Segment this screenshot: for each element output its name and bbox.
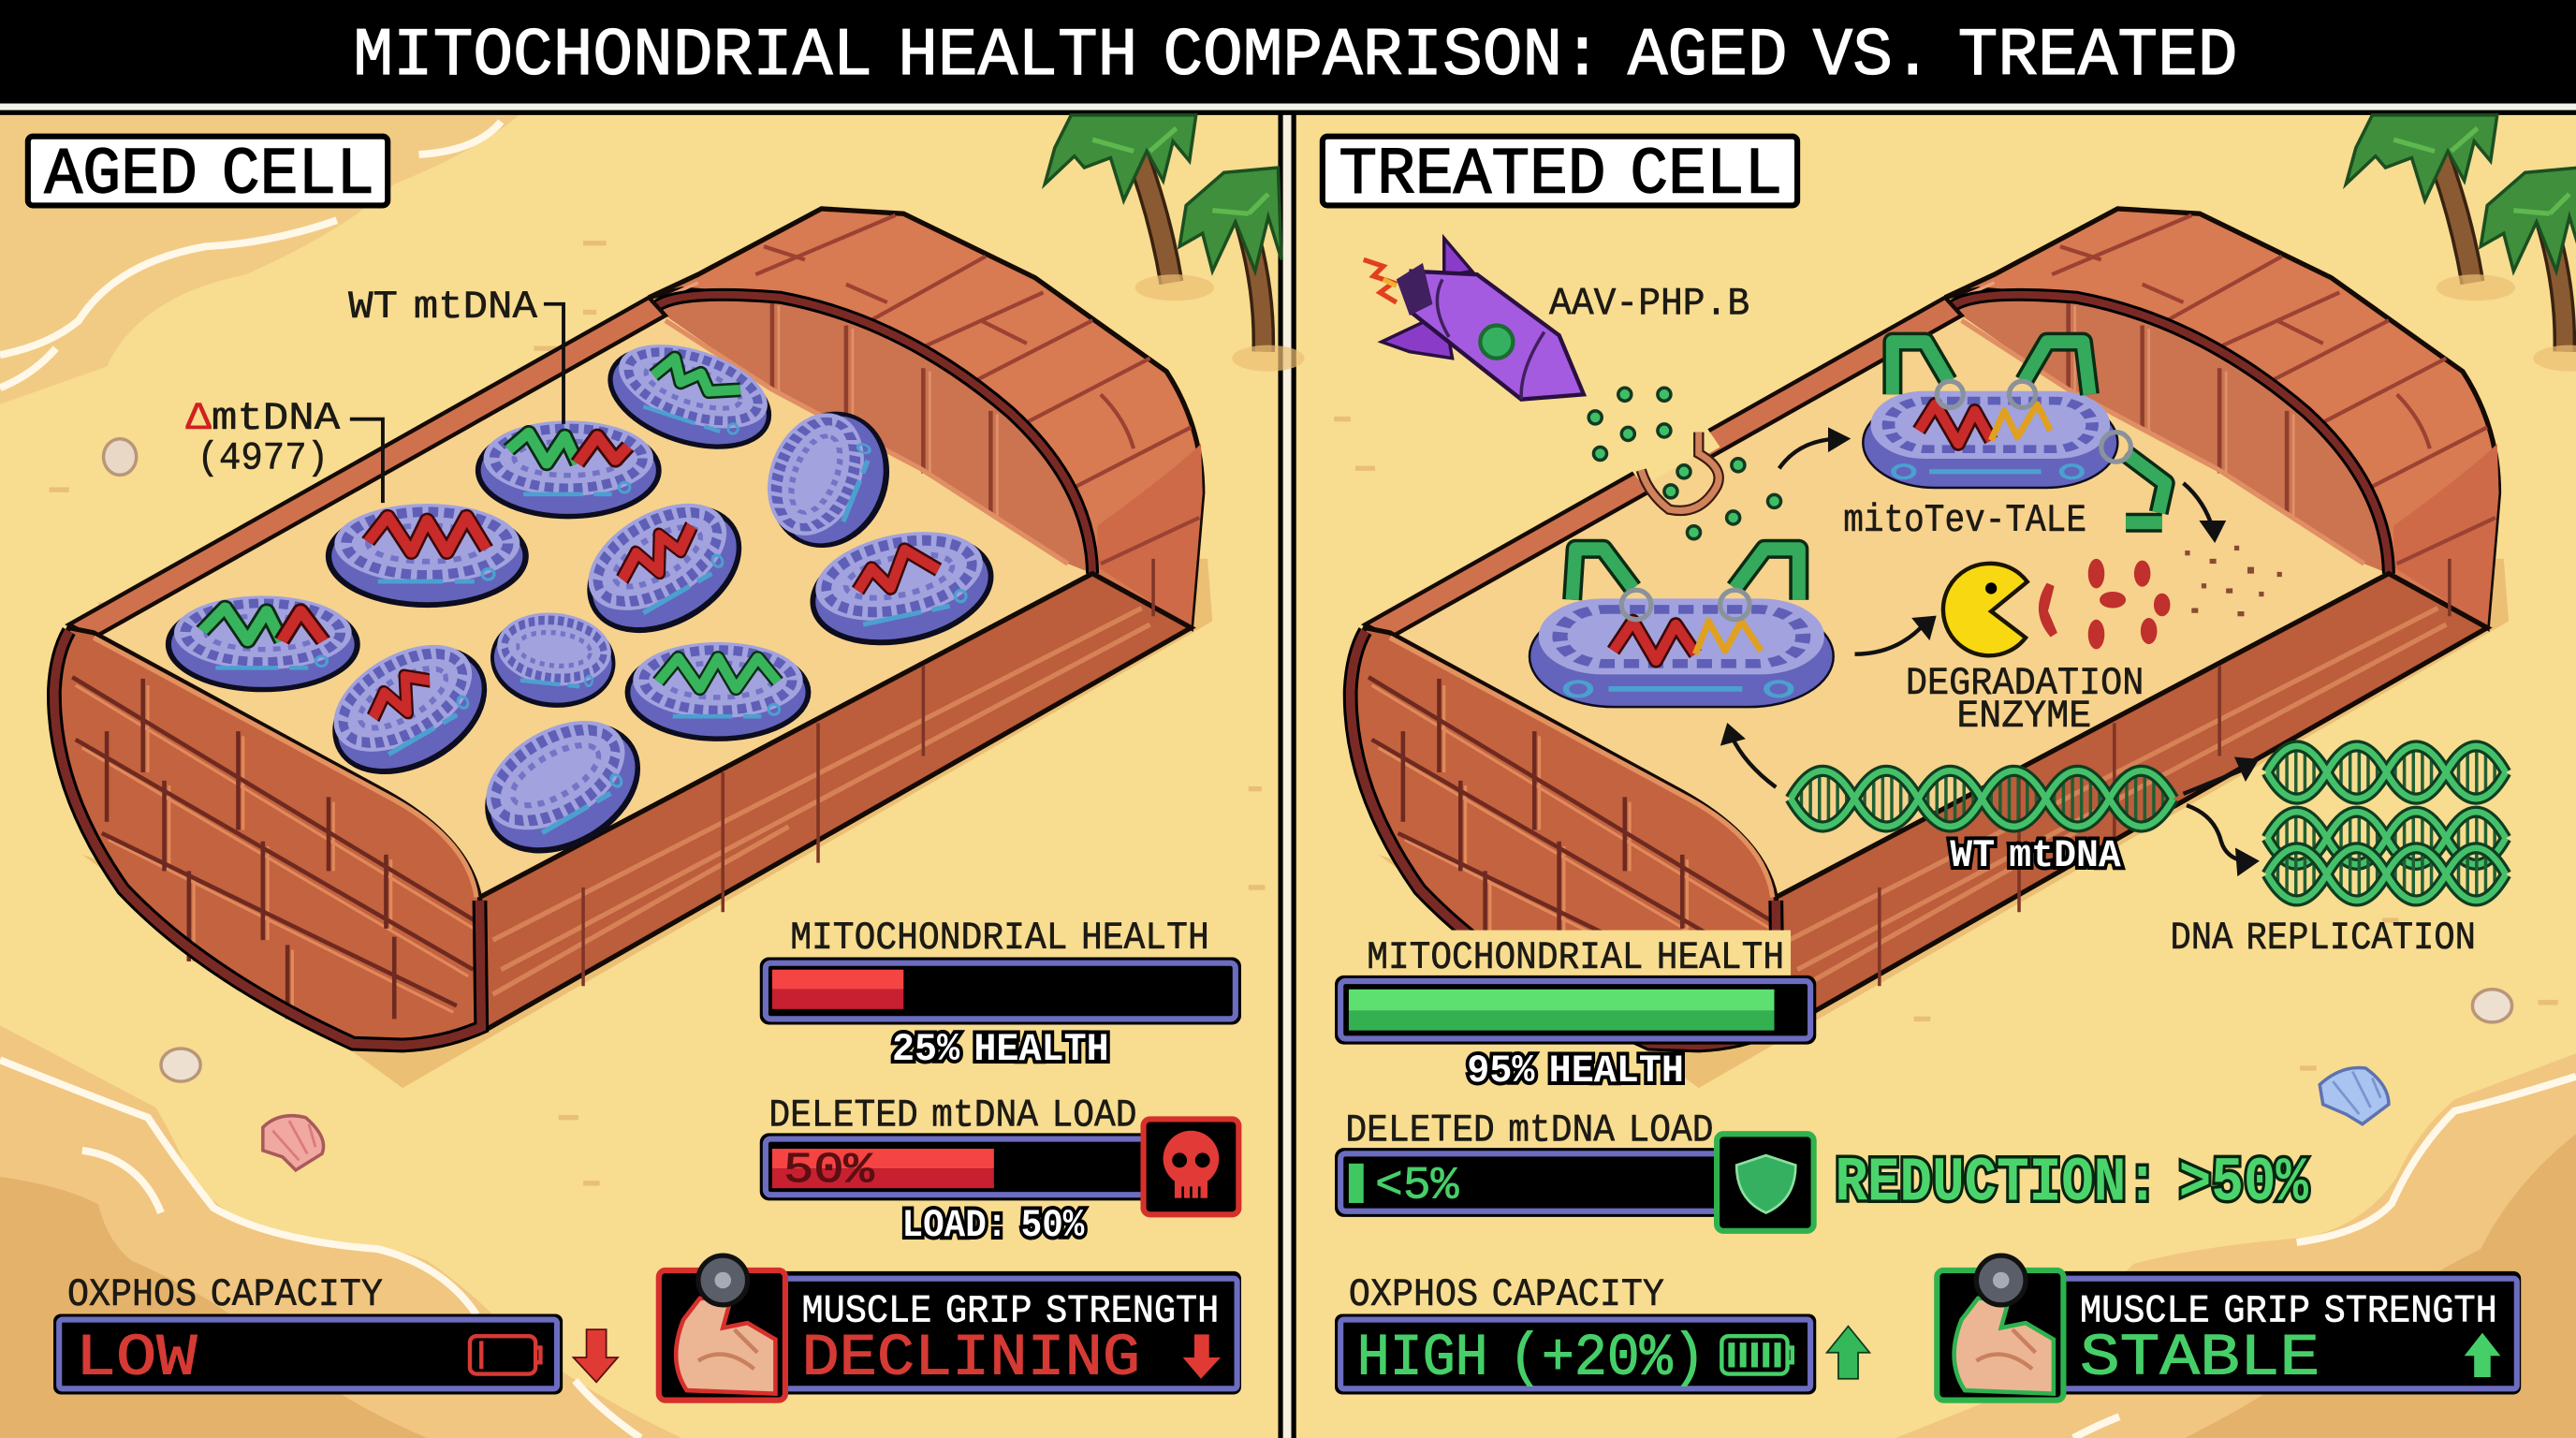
heading: treated cell: TREATED CELL bbox=[1339, 139, 1782, 213]
aged: deleted mtDNA load bar: LOAD: 50% bbox=[902, 1203, 1085, 1248]
shore: left panel top bbox=[0, 115, 520, 404]
lower mitochondrion bbox=[1530, 549, 1834, 707]
aged: OXPHOS capacity: OXPHOS CAPACITY bbox=[67, 1272, 383, 1317]
label: degradation enzyme: DEGRADATION bbox=[1906, 661, 2144, 706]
palm trees right bbox=[2346, 115, 2576, 372]
arrows: treated pathway bbox=[1723, 431, 2256, 873]
icon: flexed arm bbox=[676, 1255, 775, 1394]
aged: muscle grip strength: MUSCLE GRIP STRENGTH bbox=[801, 1288, 1219, 1333]
treated: deleted mtDNA load bar: DELETED mtDNA LOAD bbox=[1345, 1108, 1714, 1152]
arrow: down bbox=[1183, 1334, 1221, 1379]
label: WT mtDNA: WT mtDNA bbox=[1950, 833, 2122, 878]
fragments bbox=[2042, 546, 2282, 649]
icon: AAV rocket bbox=[1364, 239, 1584, 400]
aged: deleted mtDNA load bar: DELETED mtDNA LOAD bbox=[768, 1093, 1137, 1137]
membrane notch bbox=[1627, 420, 1720, 510]
cell structure bbox=[54, 209, 1212, 1088]
treated: mitochondrial health bar bbox=[1338, 931, 1814, 1093]
arrow: up bbox=[2465, 1333, 2500, 1377]
label: deleted mtDNA bbox=[185, 396, 383, 503]
aged: mitochondrial health bar: 25% HEALTH bbox=[892, 1027, 1109, 1072]
arrow: down bbox=[574, 1329, 618, 1382]
treated: OXPHOS capacity bbox=[1338, 1272, 1869, 1392]
label: degradation enzyme: ENZYME bbox=[1956, 694, 2091, 739]
pebbles and shells left bbox=[104, 439, 324, 1170]
title: MITOCHONDRIAL HEALTH COMPARISON: AGED VS. TREATED bbox=[353, 18, 2237, 95]
pebbles and shells right bbox=[2320, 990, 2512, 1124]
label: AAV-PHP.B: AAV-PHP.B bbox=[1549, 281, 1749, 326]
icon: flexed arm bbox=[1954, 1255, 2054, 1394]
treated: mitochondrial health bar: MITOCHONDRIAL HEALTH bbox=[1367, 935, 1784, 980]
aged: muscle grip strength: DECLINING bbox=[801, 1325, 1140, 1392]
heading: aged cell: AGED CELL bbox=[44, 139, 374, 213]
shore: left panel bottom bbox=[0, 1025, 681, 1438]
aged: deleted mtDNA load bar: 50% bbox=[783, 1146, 874, 1195]
treated: OXPHOS capacity: OXPHOS CAPACITY bbox=[1349, 1272, 1664, 1317]
replicated DNA helices bbox=[2267, 746, 2507, 901]
WT mtDNA helix bbox=[1791, 770, 2174, 827]
callout: reduction: REDUCTION: >50% bbox=[1835, 1148, 2309, 1219]
aged: OXPHOS capacity: LOW bbox=[76, 1325, 198, 1392]
treated: muscle grip strength: STABLE bbox=[2080, 1325, 2320, 1392]
icon: empty battery bbox=[470, 1336, 540, 1374]
label: WT mtDNA: WT mtDNA bbox=[348, 285, 538, 330]
treated: muscle grip strength bbox=[1937, 1255, 2519, 1401]
icon: skull bbox=[1144, 1119, 1238, 1214]
icon: degradation enzyme bbox=[1943, 564, 2027, 655]
treated: deleted mtDNA load bar: <5% bbox=[1375, 1160, 1459, 1212]
panel: treated cell bbox=[1351, 209, 2509, 1088]
panel dividers bbox=[1278, 111, 1296, 1438]
label: DNA replication: DNA REPLICATION bbox=[2170, 916, 2476, 961]
treated: OXPHOS capacity: HIGH (+20%) bbox=[1357, 1325, 1705, 1392]
mitochondria bbox=[168, 327, 1001, 876]
aged: deleted mtDNA load bar bbox=[762, 1093, 1238, 1248]
aged: OXPHOS capacity bbox=[56, 1272, 618, 1392]
cell structure bbox=[1351, 209, 2509, 1088]
aged: muscle grip strength bbox=[659, 1255, 1238, 1401]
treated: deleted mtDNA load bar bbox=[1338, 1108, 1814, 1231]
label: deleted mtDNA: (4977) bbox=[198, 435, 329, 480]
palm trees left bbox=[1045, 115, 1305, 372]
icon: full battery bbox=[1721, 1336, 1793, 1374]
sand specks bbox=[50, 243, 2558, 1314]
upper mitochondrion bbox=[1863, 342, 2165, 522]
treated: muscle grip strength: MUSCLE GRIP STRENGTH bbox=[2080, 1288, 2497, 1333]
aged: mitochondrial health bar: MITOCHONDRIAL HEALTH bbox=[790, 916, 1209, 961]
arrow: up bbox=[1827, 1327, 1869, 1379]
label: degradation enzyme bbox=[1906, 661, 2144, 739]
panel: aged cell bbox=[54, 209, 1212, 1088]
label: WT mtDNA bbox=[348, 285, 564, 424]
aged: mitochondrial health bar bbox=[762, 916, 1238, 1072]
treated: mitochondrial health bar: 95% HEALTH bbox=[1467, 1049, 1684, 1093]
shore: right panel bottom bbox=[1895, 1053, 2576, 1438]
robotic arms bbox=[1573, 549, 1799, 620]
title bar bbox=[0, 0, 2576, 115]
robotic arms bbox=[1893, 342, 2165, 522]
icon: shield bbox=[1717, 1134, 1814, 1231]
particles bbox=[1588, 388, 1781, 539]
label: mitoTev-TALE: mitoTev-TALE bbox=[1843, 498, 2086, 543]
label: deleted mtDNA: ΔmtDNA bbox=[185, 396, 341, 441]
